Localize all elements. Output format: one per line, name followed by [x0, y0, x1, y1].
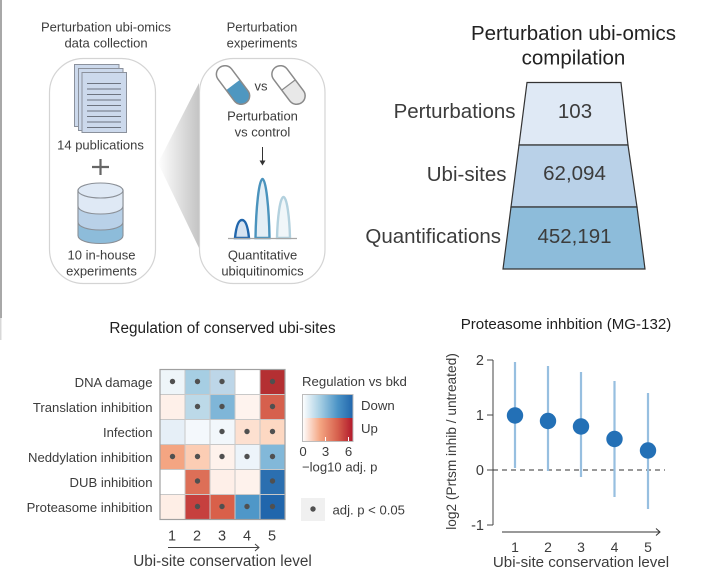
- x tick labels: [511, 539, 652, 555]
- label: quantitative ubiquitinomics: ubiquitinomics: [221, 264, 304, 278]
- row labels: Neddylation inhibition: [28, 450, 152, 465]
- heading: perturbation experiments: Perturbation: [227, 20, 297, 34]
- error bars: [515, 362, 648, 509]
- label: 10 in-house experiments: 10 in-house: [68, 248, 135, 262]
- label: perturbation vs control: Perturbation: [227, 108, 298, 124]
- label: perturbation vs control: vs control: [235, 124, 290, 140]
- legend ticks: 0: [299, 444, 307, 459]
- significance dots: [170, 379, 275, 509]
- heading: perturbation experiments: experiments: [227, 36, 298, 50]
- x tick labels: 2: [193, 528, 201, 544]
- arrow: conservation: [502, 528, 660, 536]
- label: 10 in-house experiments: experiments: [66, 264, 137, 278]
- x tick labels: 2: [544, 539, 552, 555]
- y axis: [471, 353, 493, 534]
- legend title: Regulation vs bkd: [302, 374, 407, 389]
- funnel tier: ubi-sites: [427, 145, 637, 207]
- zoom wedge: [158, 83, 199, 248]
- icon: database cylinder: [78, 183, 123, 244]
- funnel tier: ubi-sites: 62,094: [543, 162, 606, 185]
- icon: document stack: [74, 64, 126, 132]
- x tick labels: 4: [243, 528, 251, 544]
- y axis: 1: [476, 408, 484, 424]
- label: vs: vs: [254, 78, 268, 94]
- row labels: [27, 375, 152, 515]
- significance key: adj. p < 0.05: [332, 502, 405, 518]
- legend ticks: 6: [345, 444, 352, 459]
- funnel tier: perturbations: Perturbations: [394, 100, 516, 123]
- rounded panel outline: [200, 58, 325, 284]
- heading: data collection: data collection: [64, 36, 148, 50]
- x tick labels: 4: [611, 539, 619, 555]
- y axis: -1: [471, 518, 484, 534]
- heading: data collection: Perturbation ubi-omics: [41, 20, 172, 34]
- significance key: [301, 498, 405, 521]
- x tick labels: 5: [268, 528, 276, 544]
- x tick labels: 1: [168, 528, 176, 544]
- x axis title: Ubi-site conservation level: [133, 553, 312, 570]
- label: 14 publications: 14 publications: [57, 138, 144, 152]
- funnel tier: ubi-sites: Ubi-sites: [427, 163, 506, 186]
- legend: [299, 374, 407, 521]
- panel: perturbation experiments: [200, 20, 325, 284]
- legend ticks: 3: [322, 444, 329, 459]
- legend: Up: [361, 421, 378, 436]
- arrow: down: [260, 147, 266, 166]
- data points: [507, 407, 656, 459]
- row labels: Infection: [103, 425, 152, 440]
- row labels: Translation inhibition: [33, 400, 152, 415]
- funnel tier: quantifications: Quantifications: [365, 225, 501, 248]
- icon: perturbation pill: [213, 62, 253, 108]
- x tick labels: 1: [511, 539, 519, 555]
- x tick labels: 5: [644, 539, 652, 555]
- icon: chromatogram peaks: [228, 179, 297, 238]
- heading: proteasome: Proteasome inhbition (MG-132): [461, 316, 671, 333]
- row labels: DUB inhibition: [70, 475, 152, 490]
- panel: heatmap: [27, 320, 336, 570]
- legend colour bar: [302, 394, 353, 442]
- funnel tier: quantifications: [365, 207, 645, 269]
- row labels: Proteasome inhibition: [27, 500, 152, 515]
- arrow: conservation: [168, 544, 259, 551]
- legend ticks: [299, 444, 352, 459]
- x axis title: Ubi-site conservation level: [493, 554, 669, 571]
- panel: compilation funnel: [365, 22, 676, 269]
- zero line: [493, 469, 665, 471]
- x tick labels: 3: [218, 528, 226, 544]
- legend axis label: −log10 adj. p: [302, 460, 377, 474]
- funnel tier: quantifications: 452,191: [537, 225, 612, 248]
- heading: compilation: Perturbation ubi-omics: [471, 22, 676, 45]
- x tick labels: [168, 528, 276, 544]
- label: quantitative ubiquitinomics: Quantitative: [228, 248, 297, 262]
- legend labels: Down: [361, 398, 395, 413]
- icon: plus: [92, 159, 109, 175]
- heading: compilation: compilation: [522, 46, 625, 70]
- funnel tier: perturbations: 103: [558, 100, 592, 123]
- y axis: 0: [476, 463, 484, 479]
- y axis: 2: [476, 353, 484, 369]
- panel: scatter chart: [444, 316, 671, 571]
- row labels: DNA damage: [75, 375, 152, 390]
- heading: regulation: Regulation of conserved ubi-sites: [109, 320, 336, 337]
- x tick labels: 3: [577, 539, 585, 555]
- icon: control pill: [268, 62, 309, 108]
- rounded panel outline: [50, 58, 156, 284]
- funnel tier: perturbations: [394, 82, 628, 145]
- y axis title: log2 (Prtsm inhib / untreated): [444, 353, 459, 530]
- heatmap cells: [160, 370, 285, 520]
- panel: data collection: [41, 20, 172, 284]
